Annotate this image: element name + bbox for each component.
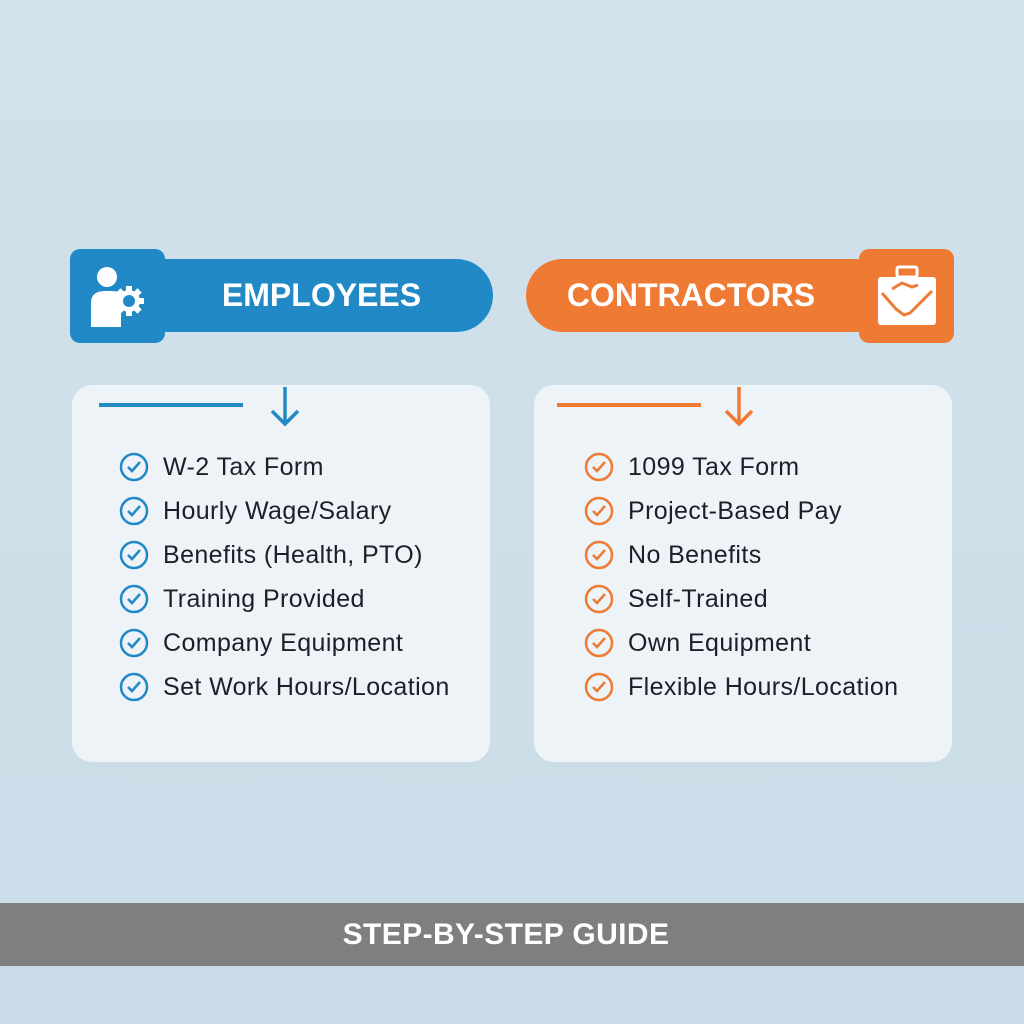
- divider line with arrow: [99, 387, 300, 426]
- panel: contractors list: Own Equipment: [628, 628, 811, 656]
- divider line with arrow: [557, 387, 754, 426]
- panel: contractors list: 1099 Tax Form: [628, 452, 799, 480]
- icon: person with gear: [70, 249, 165, 343]
- panel: contractors list: [534, 385, 952, 762]
- contractors title bar: [526, 259, 866, 332]
- panel: employees list: [72, 385, 490, 762]
- panel: contractors list: No Benefits: [628, 540, 762, 568]
- header: contractors: [526, 249, 954, 343]
- panel: contractors list: Self-Trained: [628, 584, 768, 612]
- panel: contractors list: Flexible Hours/Location: [628, 672, 898, 700]
- contractors title bar: CONTRACTORS: [567, 277, 815, 313]
- footer banner: STEP-BY-STEP GUIDE: [343, 918, 669, 950]
- panel: contractors list: Project-Based Pay: [628, 496, 842, 524]
- panel: employees list: Benefits (Health, PTO): [163, 540, 423, 568]
- panel: employees list: Hourly Wage/Salary: [163, 496, 392, 524]
- employees title bar: [160, 259, 493, 332]
- header: employees: [70, 249, 493, 343]
- panel: employees list: Company Equipment: [163, 628, 403, 656]
- panel: employees list: W-2 Tax Form: [163, 452, 324, 480]
- footer banner: [0, 903, 1024, 966]
- panel: employees list: Training Provided: [163, 584, 365, 612]
- icon: briefcase handshake: [859, 249, 954, 343]
- panel: employees list: Set Work Hours/Location: [163, 672, 450, 700]
- employees title bar: EMPLOYEES: [222, 277, 421, 313]
